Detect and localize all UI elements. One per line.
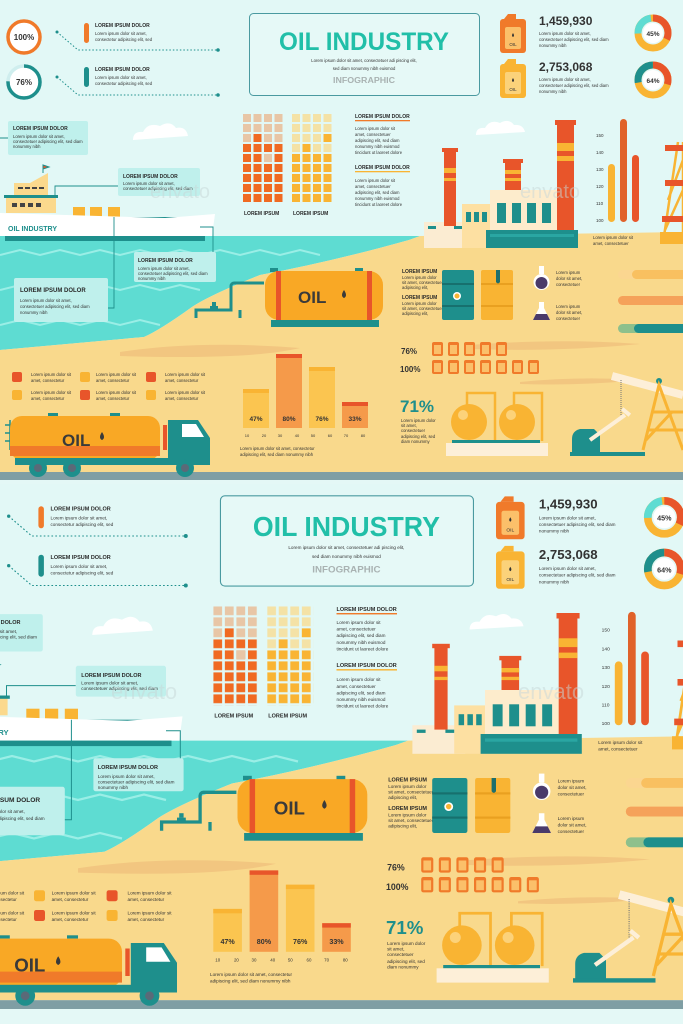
- title box: sed diam nonummy nibh euismod: [333, 66, 396, 71]
- stat: 1,459,930: [539, 14, 609, 48]
- icon: yellow canister: [500, 59, 526, 98]
- icon: flasks with text: dolor sit amet,: [556, 310, 582, 315]
- circle stat 100%: [8, 21, 40, 53]
- bar chart middle: 60: [328, 433, 333, 438]
- bar chart right: 120: [596, 184, 604, 189]
- label box: sea 1: LOREM IPSUM DOLOR: [138, 258, 193, 264]
- label box: ship 1: LOREM IPSUM DOLOR: [13, 126, 68, 132]
- label box: ship 2: LOREM IPSUM DOLOR: [123, 174, 178, 180]
- text column beside waffle: [355, 114, 410, 207]
- icon: orange canister: OIL: [509, 42, 517, 47]
- text column beside waffle: adipiscing elit, sed diam: [355, 138, 400, 143]
- progress bars right: [618, 270, 683, 333]
- donut 64%: 64%: [646, 78, 660, 85]
- legend grid bottom-left: Lorem ipsum dolor sit: [31, 390, 72, 395]
- bar chart right: 130: [596, 167, 604, 172]
- icon: flasks with text: consectetuer: [556, 316, 581, 321]
- bar chart middle: 30: [278, 433, 283, 438]
- label box: sea 2: consectetuer adipiscing elit, sed diam: [20, 304, 90, 309]
- canister icon rows: 76%: [401, 347, 417, 356]
- stat: 1,459,930: consectetuer adipiscing elit, sed diam: [539, 37, 609, 42]
- stat: 2,753,068: Lorem ipsum dolor sit amet,: [539, 77, 591, 82]
- bar chart middle: adipiscing elit, sed diam nonummy nibh: [240, 452, 314, 457]
- text column beside waffle: nonummy nibh euismod: [355, 144, 400, 149]
- separator strip: [0, 480, 683, 484]
- label box: sea 1: [134, 252, 216, 282]
- label box: sea 1: Lorem ipsum dolor sit amet,: [138, 266, 190, 271]
- text column beside waffle: adipiscing elit, sed diam: [355, 190, 400, 195]
- stat 71%: adipiscing elit, sed: [401, 434, 436, 439]
- label box: sea 2: [14, 278, 108, 322]
- legend grid bottom-left: Lorem ipsum dolor sit: [165, 372, 206, 377]
- legend grid bottom-left: Lorem ipsum dolor sit: [96, 390, 137, 395]
- label box: ship 1: Lorem ipsum dolor sit amet,: [13, 134, 65, 139]
- icon: yellow canister: OIL: [509, 87, 517, 92]
- bar chart middle: 80%: [282, 416, 296, 423]
- bar chart right: 110: [596, 201, 604, 206]
- title box: [250, 14, 480, 96]
- label box: sea 1: nonummy nibh: [138, 276, 166, 281]
- bar chart right: 140: [596, 150, 604, 155]
- bar chart right: [593, 119, 639, 246]
- icon: orange canister: [500, 14, 526, 53]
- factory: [424, 120, 578, 248]
- circle stat 76%: 76%: [16, 78, 32, 87]
- legend grid bottom-left: [12, 372, 206, 401]
- bar chart middle: 50: [311, 433, 316, 438]
- legend grid bottom-left: amet, consectetur: [96, 396, 130, 401]
- watermark: envato: [150, 181, 210, 203]
- waffle chart: [243, 114, 334, 217]
- bar chart middle: 47%: [249, 416, 263, 423]
- legend grid bottom-left: amet, consectetur: [31, 396, 65, 401]
- label box: ship 2: consectetuer adipiscing elit, sed diam: [123, 186, 193, 191]
- barrel texts: LOREM IPSUM: [402, 295, 437, 301]
- barrel texts: sit amet, consectetuer: [402, 280, 444, 285]
- ship: [0, 165, 215, 241]
- stat: 1,459,930: Lorem ipsum dolor sit amet,: [539, 31, 591, 36]
- sand: [0, 232, 683, 472]
- icon: flasks with text: [533, 266, 582, 321]
- label box: ship 2: [118, 168, 200, 196]
- stat 71%: 71%: [400, 397, 434, 416]
- stat: 2,753,068: 2,753,068: [539, 60, 593, 74]
- text column beside waffle: amet, consectetuer: [355, 184, 391, 189]
- watermark: envato: [520, 181, 580, 203]
- barrel texts: adipiscing elit,: [402, 285, 428, 290]
- stat 71%: sit amet,: [401, 423, 417, 428]
- text block: top-left 1: consectetur adipiscing elit, sed: [95, 37, 153, 42]
- stat 71%: Lorem ipsum dolor: [401, 418, 436, 423]
- barrel texts: Lorem ipsum dolor: [402, 275, 437, 280]
- donut 64%: [638, 65, 668, 95]
- text column beside waffle: nonummy nibh euismod: [355, 196, 400, 201]
- label box: sea 2: nonummy nibh: [20, 310, 48, 315]
- oil derrick: [660, 142, 683, 244]
- stat 71%: consectetuer: [401, 428, 426, 433]
- text block: top-left 1: [84, 23, 153, 43]
- bar chart right: 150: [596, 133, 604, 138]
- bar chart right: amet, consectetuer: [593, 241, 629, 246]
- bar chart middle: 70: [344, 433, 349, 438]
- watermark: [150, 181, 580, 203]
- title box: Lorem ipsum dolor sit amet, consectetuer adi piscing elit,: [311, 58, 417, 63]
- dotted connector lines: [56, 30, 220, 97]
- icon: flasks with text: consectetuer: [556, 282, 581, 287]
- bar chart middle: 80: [361, 433, 366, 438]
- panel: bottom zoomed copy: [0, 481, 683, 1009]
- oil storage tank with pipes: [196, 268, 383, 327]
- text block: top-left 2: Lorem ipsum dolor sit amet,: [95, 75, 147, 80]
- barrel texts: [402, 269, 444, 316]
- text column beside waffle: LOREM IPSUM DOLOR: [355, 114, 410, 120]
- label box: sea 1: consectetuer adipiscing elit, sed diam: [138, 271, 208, 276]
- icon: flasks with text: Lorem ipsum: [556, 304, 581, 309]
- pumpjack: [570, 376, 683, 456]
- donut 45%: 45%: [646, 31, 660, 38]
- sea: [0, 236, 420, 350]
- stat: 2,753,068: nonummy nibh: [539, 89, 567, 94]
- legend grid bottom-left: Lorem ipsum dolor sit: [96, 372, 137, 377]
- label box: ship 1: nonummy nibh: [13, 144, 41, 149]
- text column beside waffle: Lorem ipsum dolor sit: [355, 178, 396, 183]
- legend grid bottom-left: Lorem ipsum dolor sit: [165, 390, 206, 395]
- icon: barrels: [442, 270, 513, 320]
- legend grid bottom-left: amet, consectetur: [96, 378, 130, 383]
- stat: 2,753,068: [539, 60, 609, 94]
- text block: top-left 2: LOREM IPSUM DOLOR: [95, 67, 150, 73]
- clouds: [133, 121, 525, 140]
- panel: top infographic: [0, 0, 683, 480]
- bar chart middle: 20: [262, 433, 267, 438]
- text block: top-left 1: LOREM IPSUM DOLOR: [95, 23, 150, 29]
- connector lines: [0, 138, 215, 308]
- text block: top-left 2: consectetur adipiscing elit, sed: [95, 81, 153, 86]
- icon: flasks with text: dolor sit amet,: [556, 276, 582, 281]
- label box: ship 1: [8, 121, 88, 155]
- bar chart middle: 76%: [315, 416, 329, 423]
- text block: top-left 1: Lorem ipsum dolor sit amet,: [95, 31, 147, 36]
- text column beside waffle: amet, consectetuer: [355, 132, 391, 137]
- bar chart middle: 10: [245, 433, 250, 438]
- label box: ship 2: Lorem ipsum dolor sit amet,: [123, 181, 175, 186]
- barrel texts: adipiscing elit,: [402, 311, 428, 316]
- icon: flasks with text: Lorem ipsum: [556, 270, 581, 275]
- stat: 1,459,930: 1,459,930: [539, 14, 593, 28]
- legend grid bottom-left: amet, consectetur: [165, 378, 199, 383]
- stat: 2,753,068: consectetuer adipiscing elit, sed diam: [539, 83, 609, 88]
- circle stat 100%: 100%: [14, 33, 34, 42]
- text column beside waffle: tincidunt ut laoreet dolore: [355, 202, 403, 207]
- label box: sea 2: LOREM IPSUM DOLOR: [20, 288, 86, 294]
- stat 71%: [400, 397, 436, 444]
- road: [0, 472, 683, 480]
- barrel texts: LOREM IPSUM: [402, 269, 437, 275]
- bar chart middle: [240, 354, 368, 457]
- label box: ship 1: consectetuer adipiscing elit, sed diam: [13, 139, 83, 144]
- text block: top-left 2: [84, 67, 153, 87]
- bar chart middle: 40: [295, 433, 300, 438]
- oil storage tank with pipes: OIL: [298, 288, 326, 307]
- ship: OIL INDUSTRY: [8, 226, 57, 233]
- donut 45%: [638, 18, 668, 48]
- bar chart right: 100: [596, 218, 604, 223]
- barrel texts: sit amet, consectetuer: [402, 306, 444, 311]
- canister icon rows: 100%: [400, 365, 420, 374]
- barrel texts: Lorem ipsum dolor: [402, 301, 437, 306]
- waffle chart: LOREM IPSUM: [293, 211, 328, 217]
- text column beside waffle: tincidunt ut laoreet dolore: [355, 150, 403, 155]
- text column beside waffle: Lorem ipsum dolor sit: [355, 126, 396, 131]
- spherical tanks: [446, 393, 548, 456]
- title box: OIL INDUSTRY: [279, 28, 449, 56]
- legend grid bottom-left: Lorem ipsum dolor sit: [31, 372, 72, 377]
- circle stat 76%: [8, 66, 40, 98]
- title box: INFOGRAPHIC: [333, 76, 395, 85]
- canister icon rows: [400, 342, 539, 374]
- legend grid bottom-left: amet, consectetur: [165, 396, 199, 401]
- text column beside waffle: LOREM IPSUM DOLOR: [355, 165, 410, 171]
- stat 71%: diam nonummy: [401, 439, 431, 444]
- oil truck: [5, 413, 210, 477]
- oil truck: OIL: [62, 431, 90, 450]
- legend grid bottom-left: amet, consectetur: [31, 378, 65, 383]
- bar chart middle: 33%: [348, 416, 362, 423]
- stat: 1,459,930: nonummy nibh: [539, 43, 567, 48]
- bar chart middle: Lorem ipsum dolor sit amet, consectetur: [240, 446, 315, 451]
- label box: sea 2: Lorem ipsum dolor sit amet,: [20, 298, 72, 303]
- bar chart right: Lorem ipsum dolor sit: [593, 235, 634, 240]
- waffle chart: LOREM IPSUM: [244, 211, 279, 217]
